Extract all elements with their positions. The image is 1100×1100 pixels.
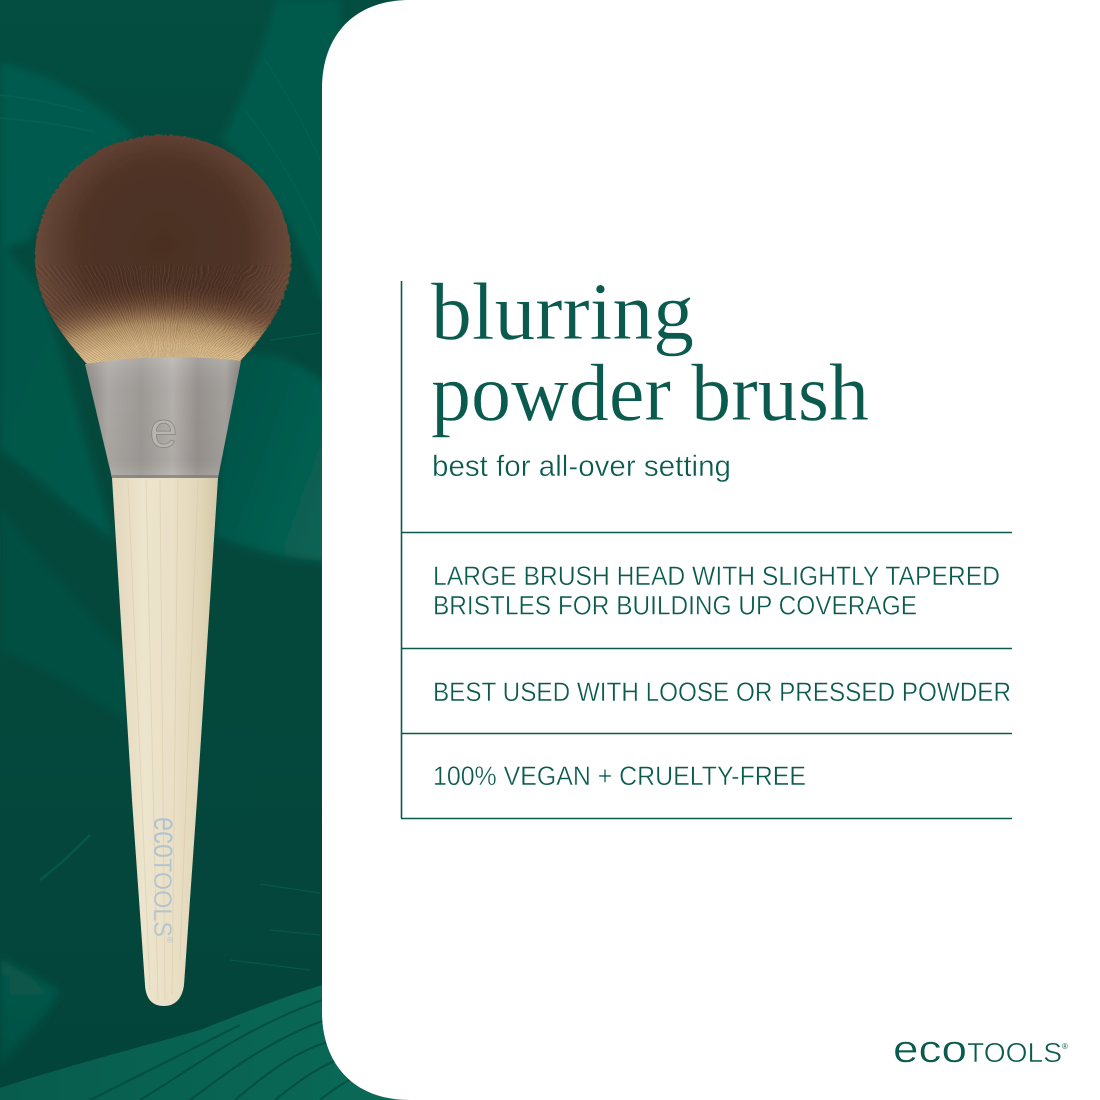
feature: powder use: BEST USED WITH LOOSE OR PRESSED POWDER — [433, 677, 1011, 707]
logo: ecotools: ® — [1062, 1042, 1068, 1051]
title: blurring — [431, 266, 694, 357]
handle wordmark — [146, 817, 185, 943]
title: powder brush — [431, 347, 869, 438]
feature: brush head — [433, 561, 1000, 620]
brush illustration — [34, 134, 292, 1006]
feature: brush head: BRISTLES FOR BUILDING UP COVERAGE — [433, 590, 917, 620]
brush bristles — [34, 134, 292, 364]
content frame rules — [401, 281, 1012, 818]
handle wordmark: ® — [165, 937, 174, 943]
subtitle: best for all-over setting — [432, 450, 731, 483]
leaf: top left — [0, 62, 135, 250]
brush ferrule — [85, 357, 241, 478]
leaf: bottom — [0, 985, 410, 1100]
leaf: top right — [222, 0, 340, 300]
handle wordmark: eco — [146, 817, 185, 858]
bristle tips colour — [35, 135, 291, 375]
feature: vegan: 100% VEGAN + CRUELTY-FREE — [433, 761, 806, 791]
leaf: lower left — [0, 510, 130, 720]
brush handle — [112, 478, 218, 1006]
logo: ecotools — [893, 1029, 1068, 1071]
feature: brush head: LARGE BRUSH HEAD WITH SLIGHTLY TAPERED — [433, 561, 1000, 591]
panel: white content card — [322, 0, 1100, 1100]
ferrule logo: e — [150, 402, 177, 458]
handle wordmark: TOOLS — [148, 858, 176, 937]
title — [431, 266, 869, 438]
leaf: edge left bottom — [0, 958, 60, 1065]
logo: ecotools: TOOLS — [967, 1037, 1062, 1068]
leaf veins: highlights — [0, 60, 320, 970]
leaf veins: bottom — [90, 1000, 365, 1100]
leaf: right middle — [215, 354, 340, 562]
feature list — [433, 561, 1011, 791]
logo: ecotools: eco — [893, 1029, 967, 1071]
bristle mass — [35, 135, 291, 375]
panel: leaf background — [0, 0, 420, 1100]
leaf: left middle — [0, 240, 115, 540]
bristle strands — [35, 265, 290, 364]
